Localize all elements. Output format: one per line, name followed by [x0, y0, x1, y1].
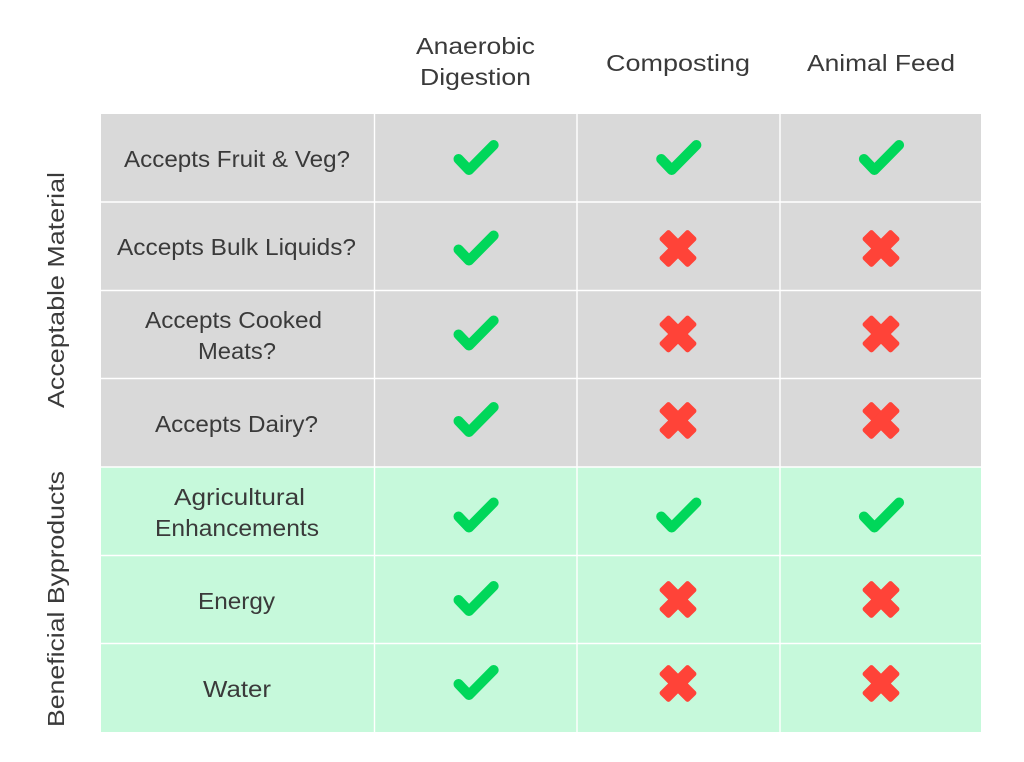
column headers: [416, 33, 955, 90]
label: Accepts Dairy?: Accepts Dairy?: [155, 411, 318, 437]
icons: Composting column: [659, 145, 697, 703]
side label: Beneficial Byproducts: Beneficial Byproducts: [43, 471, 69, 727]
panel: beneficial byproducts rows: [101, 467, 981, 732]
label: Accepts Cooked Meats?: [145, 307, 322, 364]
label: Agricultural Enhancements: Enhancements: [155, 515, 319, 541]
label: Accepts Bulk Liquids?: Accepts Bulk Liquids?: [117, 234, 356, 260]
row labels: [117, 146, 356, 702]
label: Agricultural Enhancements: Agricultural: [174, 484, 305, 510]
header: Anaerobic Digestion: Digestion: [420, 64, 531, 90]
label: Energy: Energy: [198, 588, 275, 614]
header: Anaerobic Digestion: [416, 33, 535, 90]
label: Accepts Fruit & Veg?: Accepts Fruit & Veg?: [124, 146, 350, 172]
icons: Anaerobic Digestion column: [458, 145, 494, 695]
header: Animal Feed: Animal Feed: [807, 50, 955, 76]
label: Accepts Cooked Meats?: Meats?: [198, 338, 276, 364]
label: Accepts Cooked Meats?: Accepts Cooked: [145, 307, 322, 333]
label: Water: Water: [203, 676, 271, 702]
label: Agricultural Enhancements: [155, 484, 319, 541]
icons: Animal Feed column: [862, 145, 900, 703]
panel: acceptable material rows: [101, 114, 981, 467]
side label: Acceptable Material: Acceptable Material: [43, 172, 69, 408]
header: Anaerobic Digestion: Anaerobic: [416, 33, 535, 59]
header: Composting: Composting: [606, 50, 750, 76]
